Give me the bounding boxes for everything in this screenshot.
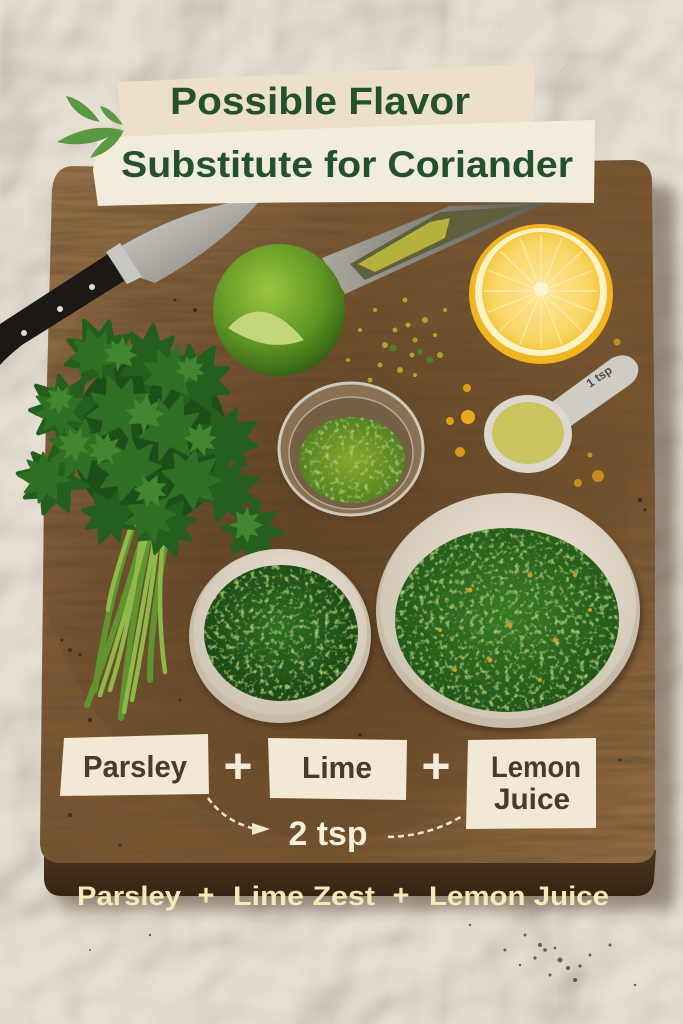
amount: 2 tsp: 2 tsp — [288, 815, 368, 853]
arrow: to 2 tsp from left — [208, 798, 270, 835]
bottom formula — [77, 880, 609, 912]
parsley leaves — [12, 306, 285, 566]
bottom formula: Parsley — [77, 881, 181, 911]
chef knife — [0, 198, 262, 365]
lime zest scatter — [346, 298, 620, 487]
label: Parsley — [60, 734, 209, 796]
title banner top — [118, 64, 535, 140]
label: Lemon Juice: Juice — [494, 783, 570, 816]
measuring spoon with lemon juice: 1 tsp — [584, 363, 615, 390]
lime — [213, 244, 345, 376]
large bowl of parsley lime mixture — [376, 493, 643, 732]
measuring spoon with lemon juice — [484, 355, 638, 473]
glass bowl of lime zest — [278, 383, 424, 518]
bottom formula: + — [393, 880, 409, 912]
parsley stems — [87, 510, 170, 718]
scattered pepper specks on paper — [89, 924, 636, 986]
icon: herb sprig — [57, 96, 124, 158]
label: Lime — [268, 738, 407, 800]
title line 2: Substitute for Coriander — [121, 144, 573, 185]
cutting board — [30, 160, 676, 910]
arrow: from 2 tsp to lemon juice — [388, 815, 464, 837]
bottom formula: Lime Zest — [233, 881, 375, 911]
title banner bottom — [93, 120, 595, 206]
citrus flecks — [438, 572, 592, 682]
label: Lime: Lime — [302, 750, 372, 785]
zester grater — [322, 203, 545, 294]
label: Lemon Juice: Lemon — [491, 751, 581, 784]
bottom formula: Lemon Juice — [429, 881, 609, 911]
label: Lemon Juice — [466, 738, 596, 829]
title — [57, 64, 595, 206]
lemon half — [469, 224, 613, 364]
label: Parsley: Parsley — [83, 749, 188, 784]
small bowl of chopped parsley — [189, 549, 374, 726]
plus sign: + — [223, 738, 253, 794]
bottom formula: + — [198, 880, 214, 912]
parsley bunch — [12, 306, 285, 718]
specks on board — [60, 298, 646, 846]
plus sign: + — [421, 738, 451, 794]
title line 1: Possible Flavor — [170, 81, 470, 123]
